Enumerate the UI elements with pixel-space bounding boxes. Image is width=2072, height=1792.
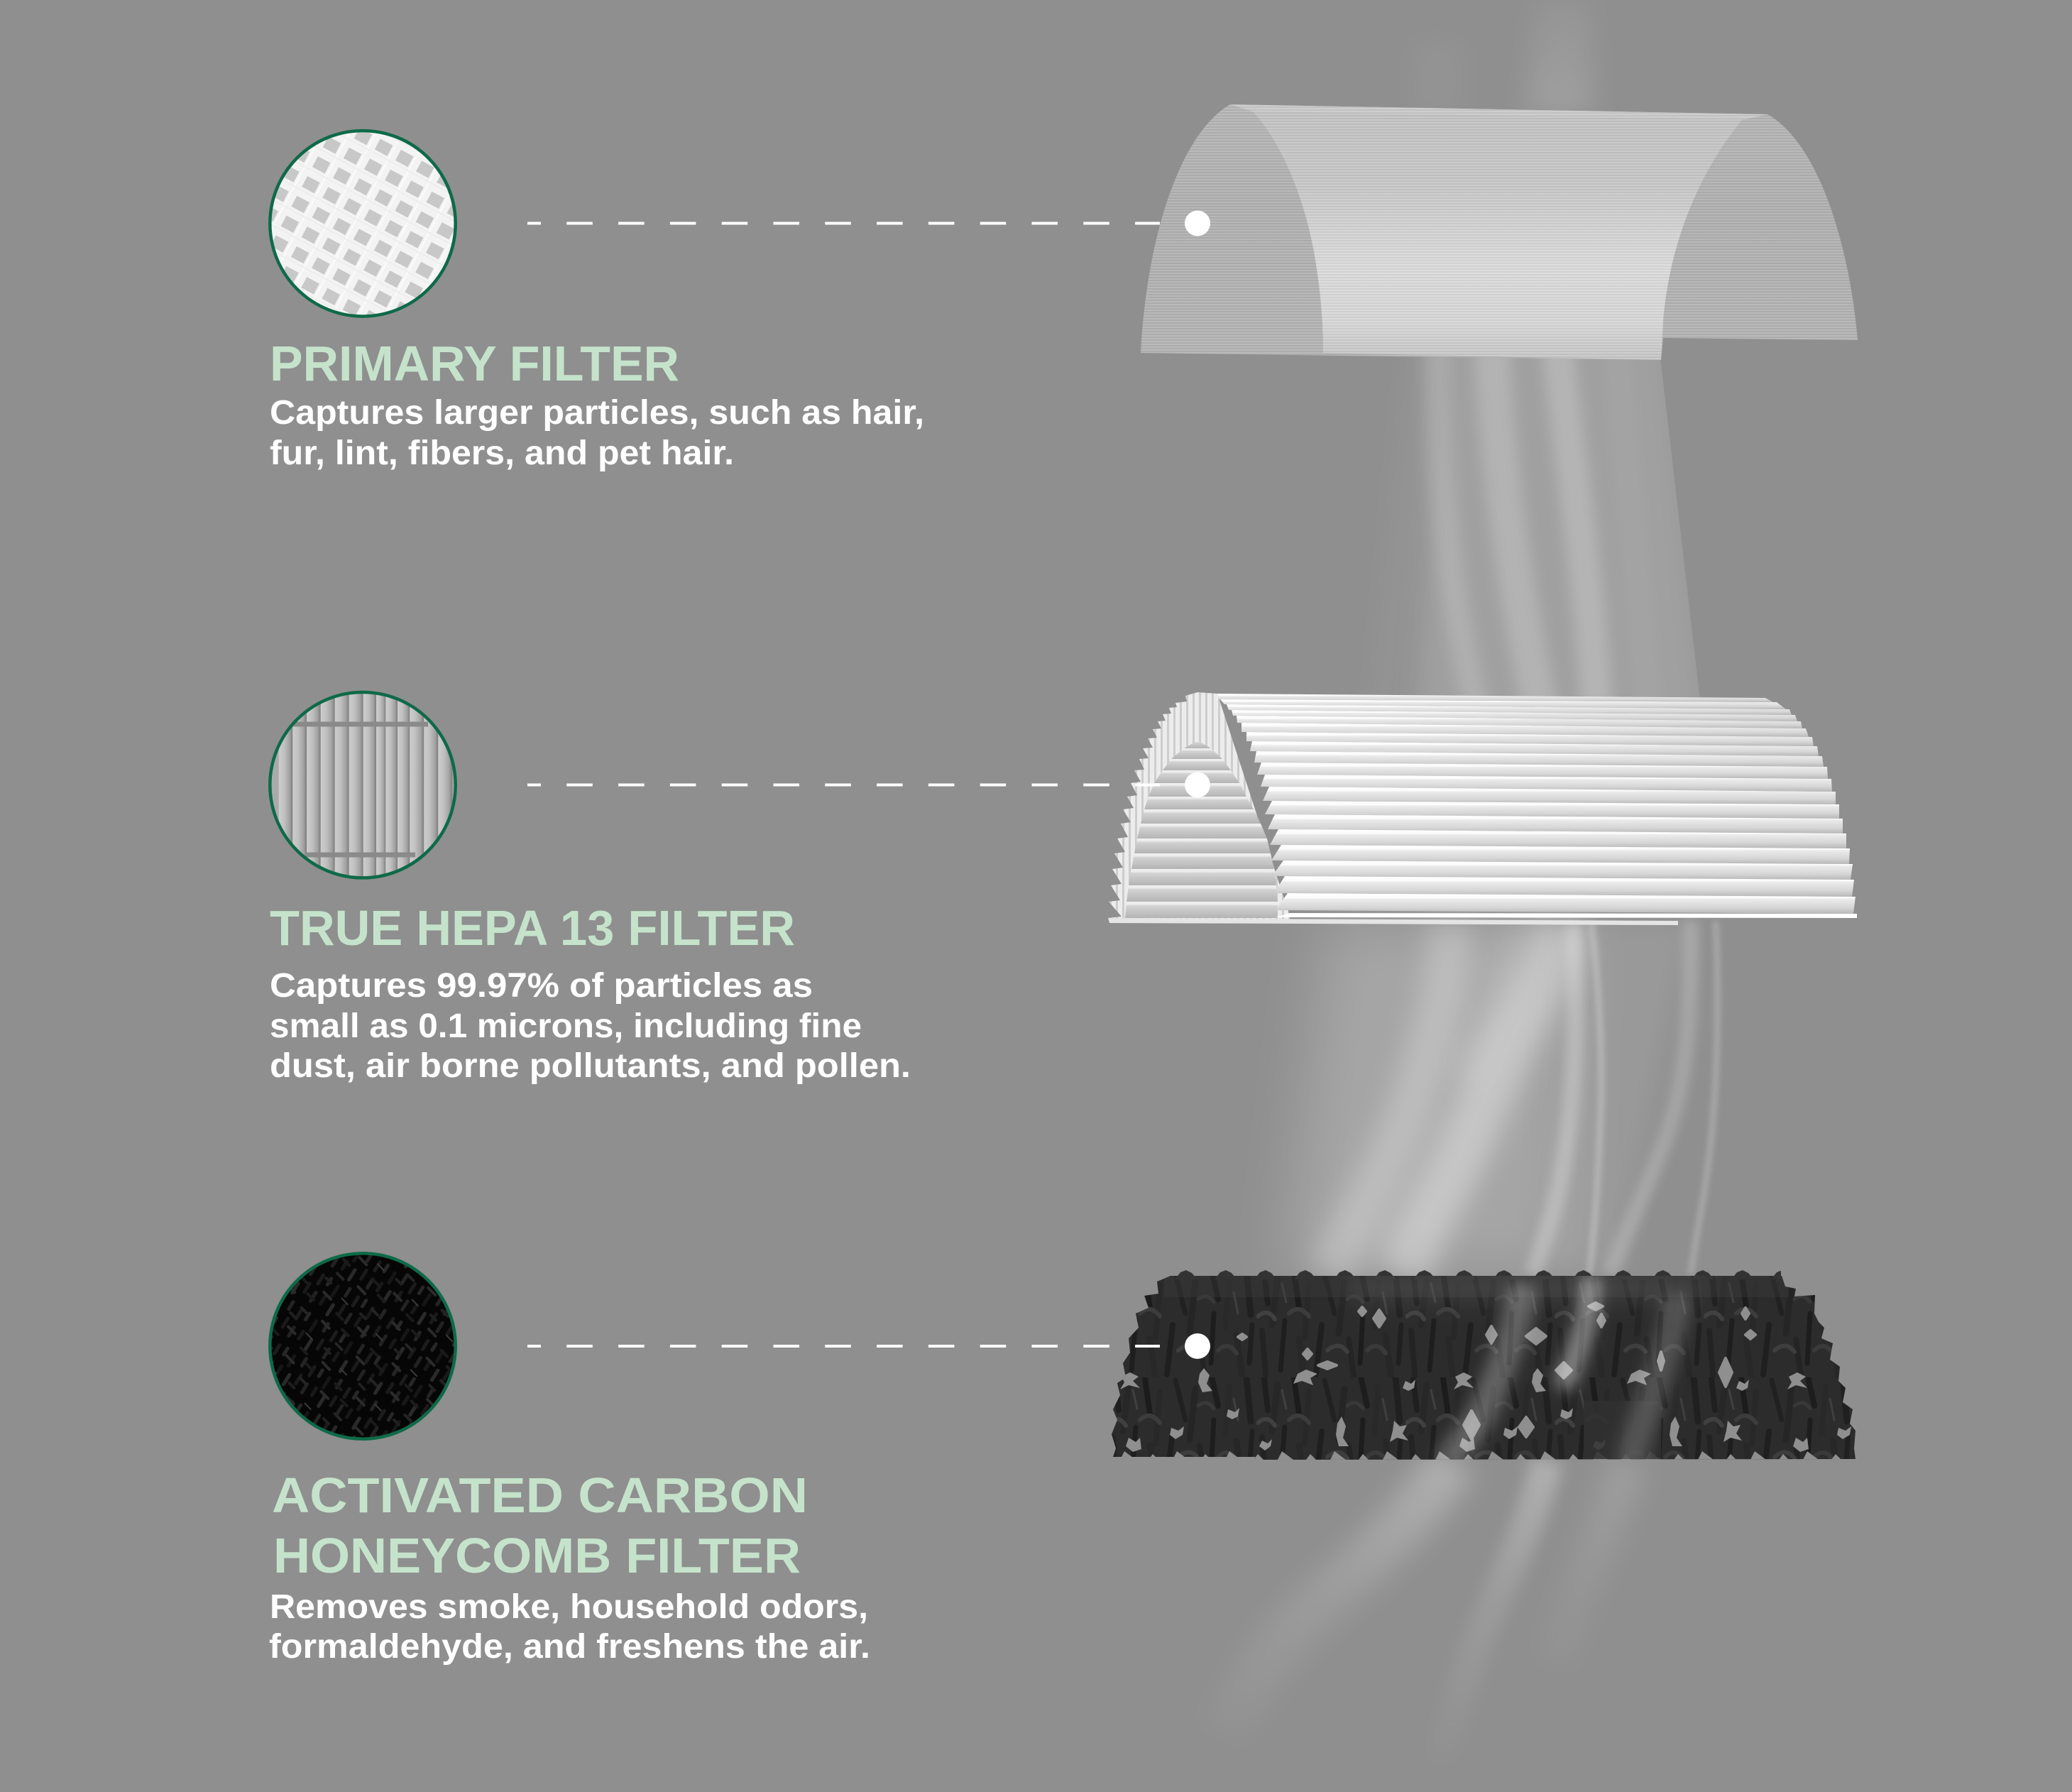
- smoke: air flow behind filters: [1224, 0, 1718, 1768]
- smoke: air passing over carbon: [1349, 1276, 1704, 1458]
- text: primary filter description: [270, 394, 924, 472]
- heading: activated carbon honeycomb filter: ACTIVATED CARBON: [272, 1468, 808, 1523]
- heading: activated carbon honeycomb filter: HONEYCOMB FILTER: [273, 1528, 801, 1583]
- icon: HEPA pleat swatch: [268, 690, 457, 880]
- illustration: pleated HEPA filter: [1108, 692, 1857, 925]
- panel: true HEPA 13 filter: [268, 690, 1857, 1085]
- connector: primary filter: [527, 210, 1210, 236]
- icon: carbon pellet swatch: [268, 1252, 457, 1441]
- heading: activated carbon honeycomb filter: [272, 1468, 808, 1583]
- panel: activated carbon honeycomb filter: [268, 1252, 1860, 1666]
- illustration: carbon pellet filter: [1107, 1269, 1860, 1463]
- illustration: primary mesh filter: [1136, 99, 1860, 362]
- connector: carbon filter: [527, 1333, 1210, 1359]
- text: carbon description: Removes smoke, household odors,: [270, 1588, 868, 1626]
- text: carbon description: [269, 1588, 870, 1666]
- icon: primary filter mesh swatch: [270, 131, 456, 317]
- heading: true HEPA 13 filter: TRUE HEPA 13 FILTER: [270, 900, 795, 956]
- connector: HEPA filter: [527, 772, 1210, 798]
- text: HEPA description: dust, air borne pollutants, and pollen.: [270, 1047, 911, 1085]
- panel: primary filter: [270, 99, 1860, 472]
- text: primary filter description: fur, lint, fibers, and pet hair.: [270, 435, 734, 472]
- heading: primary filter: PRIMARY FILTER: [270, 336, 679, 391]
- text: HEPA description: small as 0.1 microns, including fine: [270, 1007, 862, 1045]
- text: HEPA description: [270, 967, 911, 1085]
- text: HEPA description: Captures 99.97% of particles as: [270, 967, 813, 1005]
- text: carbon description: formaldehyde, and freshens the air.: [269, 1628, 870, 1666]
- text: primary filter description: Captures larger particles, such as hair,: [270, 394, 924, 432]
